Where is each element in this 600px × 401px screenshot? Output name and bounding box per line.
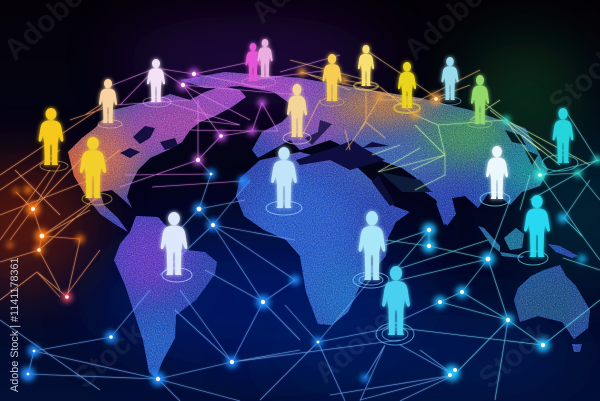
figure: pink <box>257 39 273 77</box>
people figures <box>39 39 574 335</box>
lines: magenta <box>105 55 340 187</box>
figure: green <box>471 75 489 124</box>
lines: blue <box>0 174 454 401</box>
figure: cyan Southeast Asia <box>524 195 550 257</box>
vertical image ID caption: Adobe Stock | #1141178361 <box>9 258 21 392</box>
figure: magenta <box>245 43 261 81</box>
figure: yellow far left <box>39 108 63 165</box>
lines: orange <box>0 105 120 300</box>
lines: cyan <box>385 110 600 400</box>
figure: teal <box>552 108 574 163</box>
figure: light blue Africa north <box>271 147 297 208</box>
seas and lakes <box>120 120 538 266</box>
figure: white Asia <box>486 146 508 199</box>
lines: green <box>372 100 590 190</box>
figure: peach Europe <box>287 84 307 137</box>
node glows <box>7 68 600 386</box>
watermarks: Stock <box>473 316 556 395</box>
glowing network nodes <box>7 68 600 386</box>
lines: warm <box>290 50 480 150</box>
figure: light blue Africa south <box>359 211 385 280</box>
world map continents <box>68 72 590 378</box>
figure: yellow left <box>80 137 106 198</box>
figure: golden <box>322 54 342 101</box>
figure: pale blue <box>441 57 459 100</box>
figure: pale lilac <box>147 59 165 102</box>
figure: peach North America <box>99 79 117 123</box>
watermarks: Stock <box>68 316 151 395</box>
ground rings under figures <box>40 77 578 345</box>
node cores <box>27 72 545 381</box>
figure: pale South America <box>161 212 187 275</box>
figure: cyan Indian Ocean <box>382 266 410 335</box>
figure: light yellow <box>358 45 374 86</box>
watermarks: Adobe <box>308 303 399 390</box>
figure: lime yellow <box>398 62 416 108</box>
